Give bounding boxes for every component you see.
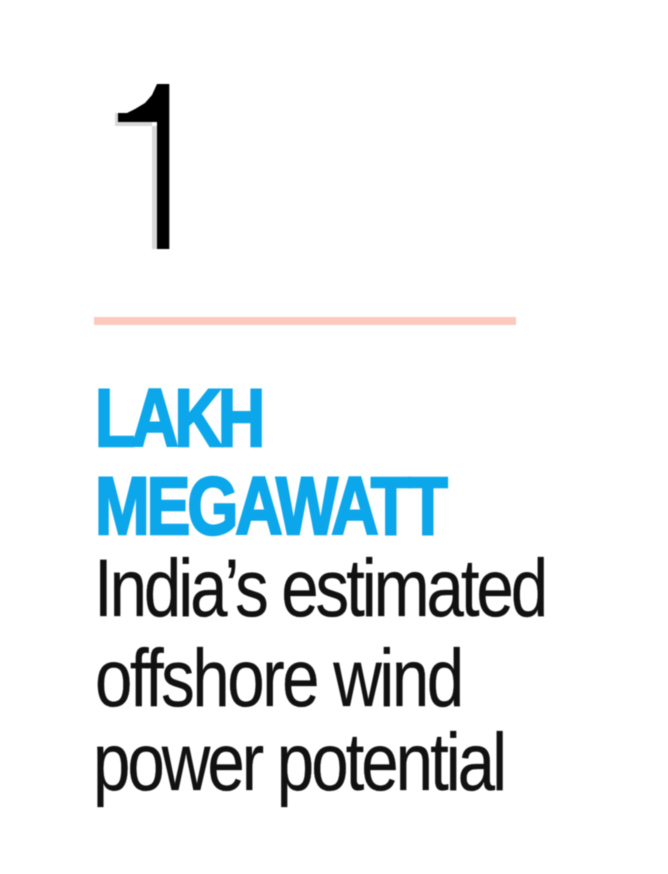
heading: lakh megawatt: LAKH (95, 373, 261, 464)
description text: India’s estimated (94, 543, 545, 634)
description text: power potential (93, 717, 504, 808)
divider rule (94, 317, 516, 325)
description text: offshore wind (95, 633, 462, 724)
heading: lakh megawatt (95, 373, 449, 552)
heading: lakh megawatt: MEGAWATT (95, 461, 445, 552)
description text (93, 543, 545, 808)
big number 1 (114, 83, 170, 250)
